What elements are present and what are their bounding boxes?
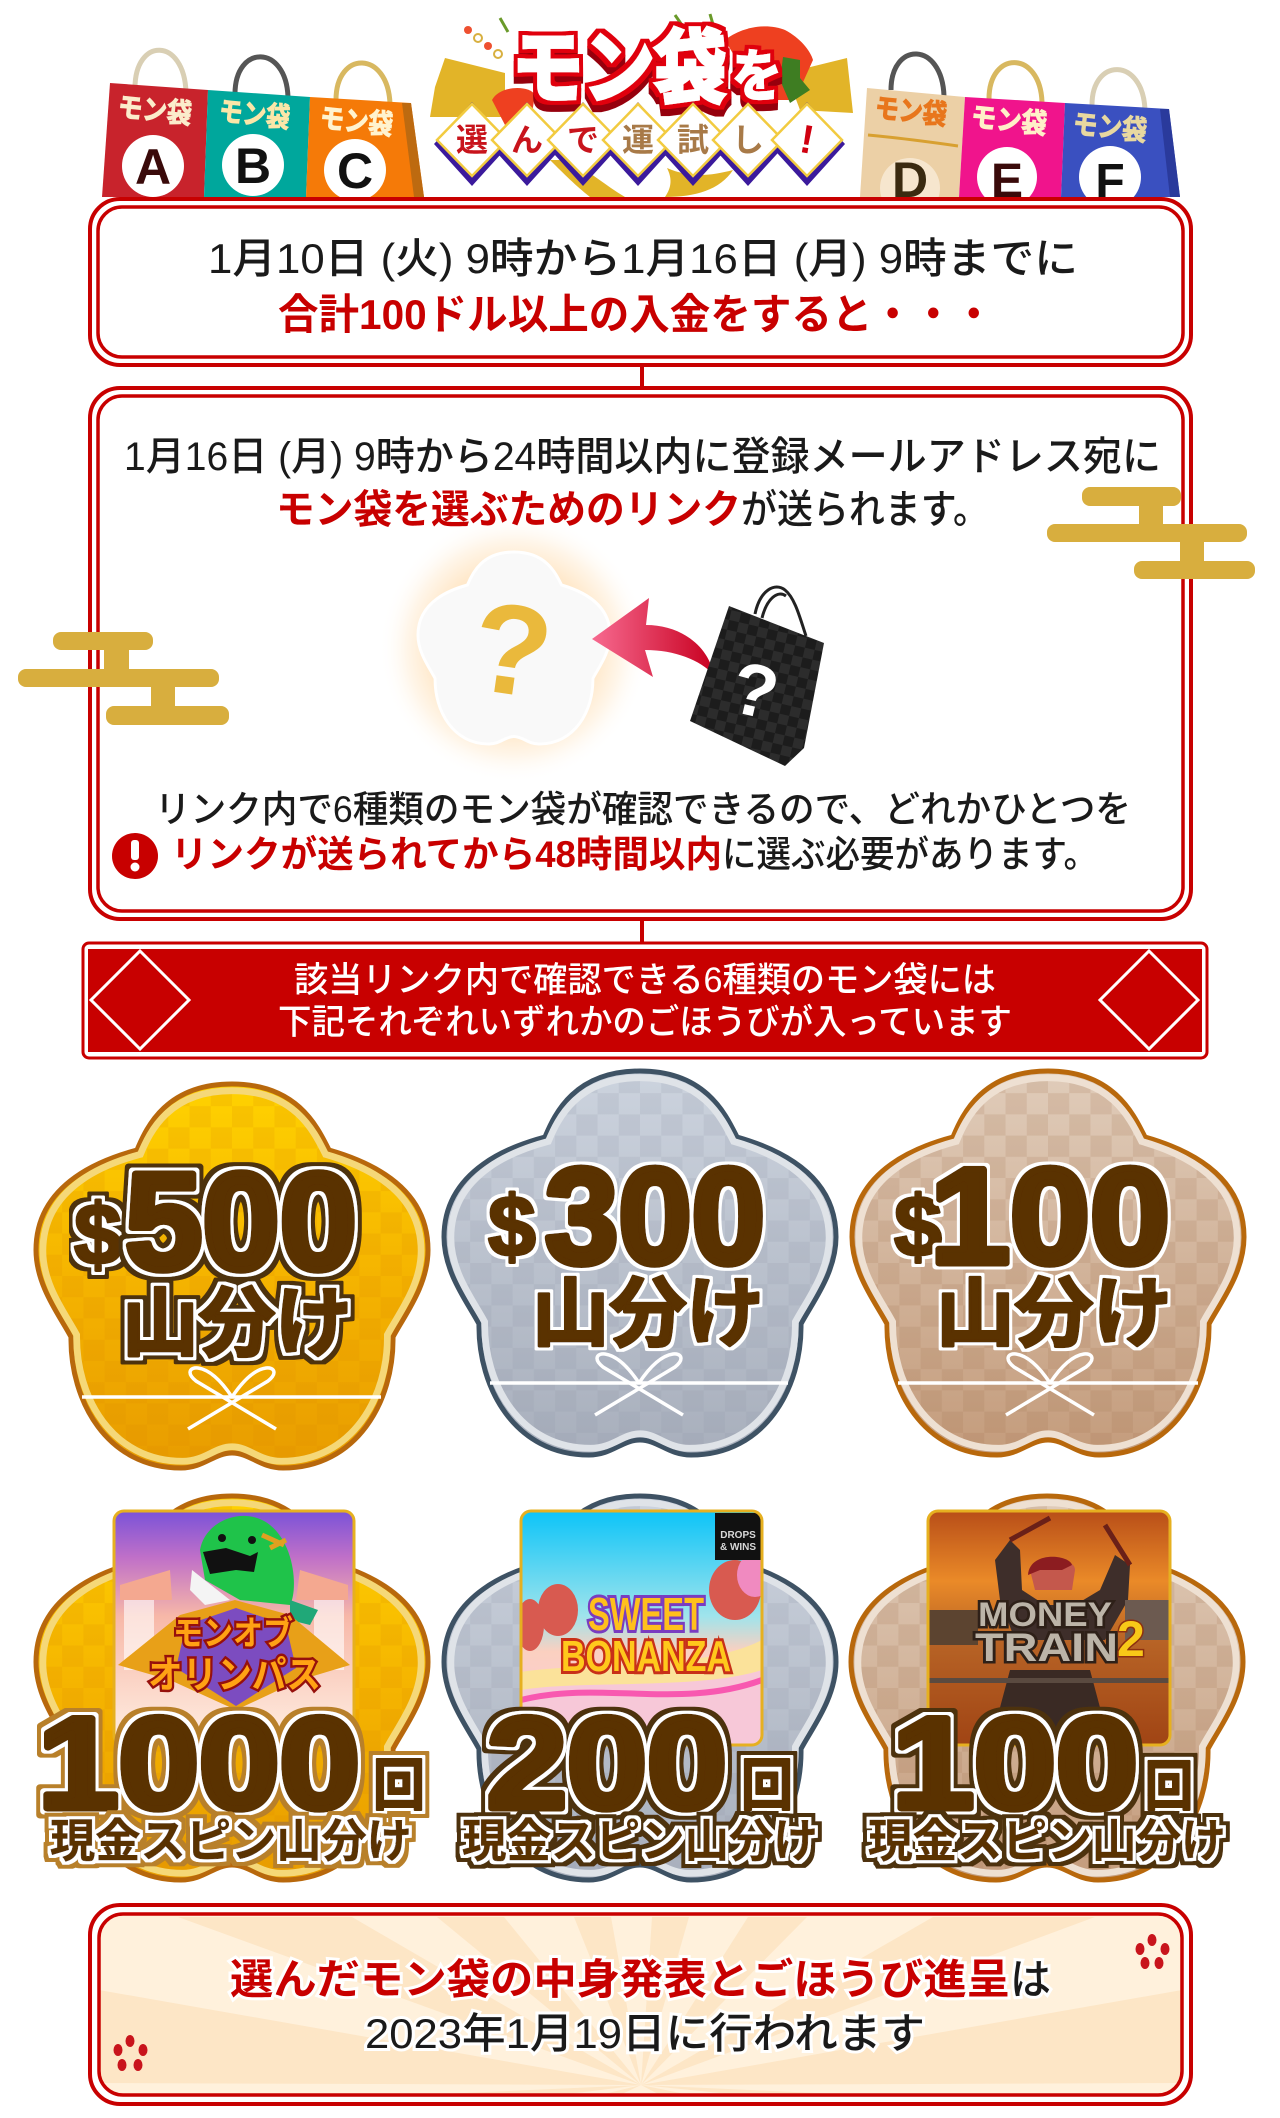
glow behind flower — [379, 513, 649, 783]
white plum flower with question mark — [418, 552, 610, 744]
deposit period text: 1月10日 (火) 9時から1月16日 (月) 9時までに — [208, 235, 1078, 282]
drops and wins badge — [715, 1513, 762, 1560]
spins: 1000 gold — [36, 1496, 428, 1880]
diamond label で: で — [567, 122, 599, 158]
diamond label 試: 試 — [677, 122, 709, 158]
bronze flower badge — [851, 1496, 1243, 1880]
confirmation text: リンク内で6種類のモン袋が確認できるので、どれかひとつを — [155, 789, 1131, 830]
bag A: モン袋 — [116, 91, 193, 130]
diamond label 運: 運 — [622, 122, 654, 158]
spins: 100 bronze — [851, 1496, 1243, 1880]
gold flower badge — [36, 1084, 428, 1468]
spins: 200 silver — [444, 1496, 836, 1880]
header: title logo — [430, 14, 853, 197]
ribbon and bow — [490, 1354, 788, 1415]
bag D — [860, 54, 965, 218]
prize: $100 bronze — [852, 1071, 1244, 1455]
decoration: red fan and leaf — [492, 26, 813, 125]
connector 1 — [640, 366, 644, 388]
label 山分け: 山分け — [936, 1272, 1172, 1357]
warning icon — [112, 833, 158, 879]
unit 回: 回 — [1145, 1757, 1193, 1817]
green mascot — [190, 1516, 318, 1625]
count 200: 200 — [487, 1690, 727, 1836]
bag C — [306, 63, 424, 201]
diamond right — [1100, 951, 1198, 1049]
link delivery text: 1月16日 (月) 9時から24時間以内に登録メールアドレス宛に — [124, 435, 1161, 479]
ribbon and bow — [82, 1368, 381, 1429]
title text small: を — [732, 45, 782, 108]
bag C: C — [337, 143, 373, 199]
game title 2: 2 — [1117, 1611, 1145, 1667]
prize: $300 silver — [444, 1071, 836, 1455]
icon: gold cloud left — [18, 632, 229, 725]
link highlight text: モン袋を選ぶためのリンク — [276, 488, 741, 532]
panel: deposit condition — [90, 199, 1191, 365]
48 hour text end: に選ぶ必要があります。 — [722, 834, 1098, 875]
bag C: モン袋 — [318, 102, 394, 141]
amount 300: 300 — [545, 1140, 765, 1292]
bag D: モン袋 — [873, 92, 948, 131]
bag B — [204, 57, 310, 197]
gold wings — [118, 1600, 350, 1710]
bag F: F — [1095, 155, 1125, 208]
game title line 1: モンオブ — [173, 1614, 293, 1653]
announcement highlight: 選んだモン袋の中身発表とごほうび進呈 — [230, 1956, 1010, 2003]
bronze flower badge — [852, 1071, 1244, 1455]
connector 2 — [640, 919, 644, 944]
48 hour highlight: リンクが送られてから48時間以内 — [171, 834, 722, 875]
diamond label ん: ん — [511, 122, 543, 158]
announcement date: 2023年1月19日に行われます — [365, 2010, 925, 2057]
banner: rewards notice — [83, 943, 1207, 1058]
panel: link delivery — [90, 388, 1191, 919]
cowboy figure — [990, 1518, 1130, 1745]
bag A: A — [135, 139, 171, 195]
sunburst rays — [99, 1917, 1182, 2095]
banner text line 1: 該当リンク内で確認できる6種類のモン袋には — [294, 961, 996, 1000]
bag E: E — [991, 155, 1023, 208]
amount $: $ — [488, 1179, 536, 1275]
header: lucky bags right — [860, 54, 1180, 218]
purple shield — [176, 1608, 296, 1706]
diamond label !: ! — [797, 117, 817, 163]
unit 回: 回 — [373, 1754, 425, 1817]
game title line 2: オリンパス — [148, 1655, 321, 1697]
header: lucky bags left — [102, 50, 424, 201]
amount 100: 100 — [930, 1140, 1170, 1292]
game thumbnail: Sweet Bonanza — [516, 1511, 773, 1745]
diamond label 選: 選 — [456, 122, 488, 158]
diamond label し: し — [732, 122, 764, 158]
thumbnail border — [114, 1511, 354, 1745]
label 現金スピン山分け: 現金スピン山分け — [868, 1815, 1226, 1867]
bag B: B — [235, 138, 271, 194]
silver flower badge — [444, 1496, 836, 1880]
diamond left — [91, 951, 189, 1049]
icon: red dot flower right — [1136, 1934, 1170, 1969]
game thumbnail: モンオブオリンパス — [114, 1511, 354, 1745]
label 山分け: 山分け — [532, 1272, 764, 1357]
black mystery bag: ? — [724, 645, 786, 736]
diamond row — [434, 102, 845, 186]
link delivery text end: が送られます。 — [741, 488, 989, 532]
bag F — [1061, 70, 1180, 208]
thumbnail border — [521, 1511, 762, 1745]
game title BONANZA: BONANZA — [561, 1632, 731, 1681]
banner text line 2: 下記それぞれいずれかのごほうびが入っています — [278, 1003, 1012, 1042]
amount $: $ — [74, 1187, 122, 1283]
label 現金スピン山分け: 現金スピン山分け — [462, 1815, 818, 1867]
bag E: モン袋 — [970, 101, 1048, 140]
title text: モン袋 — [512, 24, 726, 113]
black mystery bag — [690, 587, 824, 766]
thumbnail border — [928, 1511, 1170, 1745]
game title TRAIN: TRAIN — [975, 1626, 1118, 1670]
ribbon and bow — [898, 1354, 1198, 1415]
icon: red dot flower left — [114, 2035, 148, 2071]
amount $: $ — [894, 1179, 942, 1275]
silver flower badge — [444, 1071, 836, 1455]
label 現金スピン山分け: 現金スピン山分け — [50, 1815, 412, 1867]
white plum flower with question mark: ? — [463, 574, 561, 727]
bag F: モン袋 — [1071, 108, 1148, 147]
game title SWEET: SWEET — [588, 1588, 704, 1640]
drops and wins badge: DROPS — [720, 1530, 756, 1541]
game thumbnail: Money Train 2 — [928, 1511, 1170, 1745]
bag B: モン袋 — [218, 95, 291, 134]
panel: announcement — [90, 1905, 1191, 2104]
bag A — [102, 50, 208, 197]
decoration: gold fans — [430, 58, 853, 197]
amount 500: 500 — [125, 1145, 357, 1299]
announcement particle: は — [1010, 1956, 1051, 2003]
count 1000: 1000 — [38, 1690, 360, 1836]
prize: $500 gold — [36, 1084, 428, 1468]
deposit amount text: 合計100ドル以上の入金をすると・・・ — [278, 291, 994, 338]
arrow — [592, 598, 714, 677]
decoration: bead sprig — [464, 14, 714, 58]
drops and wins badge: & WINS — [720, 1542, 756, 1553]
count 100: 100 — [892, 1690, 1138, 1836]
game title MONEY: MONEY — [978, 1596, 1112, 1634]
unit 回: 回 — [741, 1754, 793, 1817]
bag D: D — [892, 152, 928, 208]
icon: gold cloud right — [1047, 487, 1255, 579]
gold flower badge — [36, 1496, 428, 1880]
bag E — [959, 63, 1065, 208]
label 山分け: 山分け — [122, 1282, 352, 1367]
